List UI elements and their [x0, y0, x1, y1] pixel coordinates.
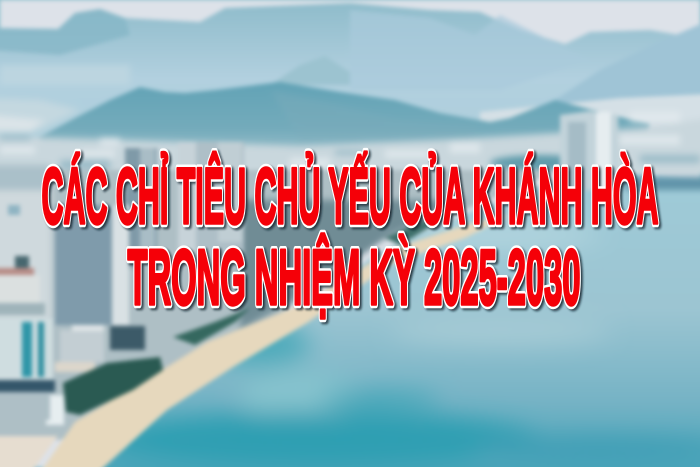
tall towers	[0, 111, 618, 425]
dark trees	[0, 212, 455, 415]
city left of beach	[0, 170, 560, 440]
pale patch behind green range on the right	[480, 94, 700, 150]
distant mountains	[0, 3, 700, 140]
beach	[37, 215, 510, 467]
green mountain range	[38, 82, 650, 160]
title	[42, 151, 660, 323]
white city band	[0, 118, 700, 175]
pale haze at left edge	[0, 98, 80, 135]
sea	[85, 172, 700, 467]
